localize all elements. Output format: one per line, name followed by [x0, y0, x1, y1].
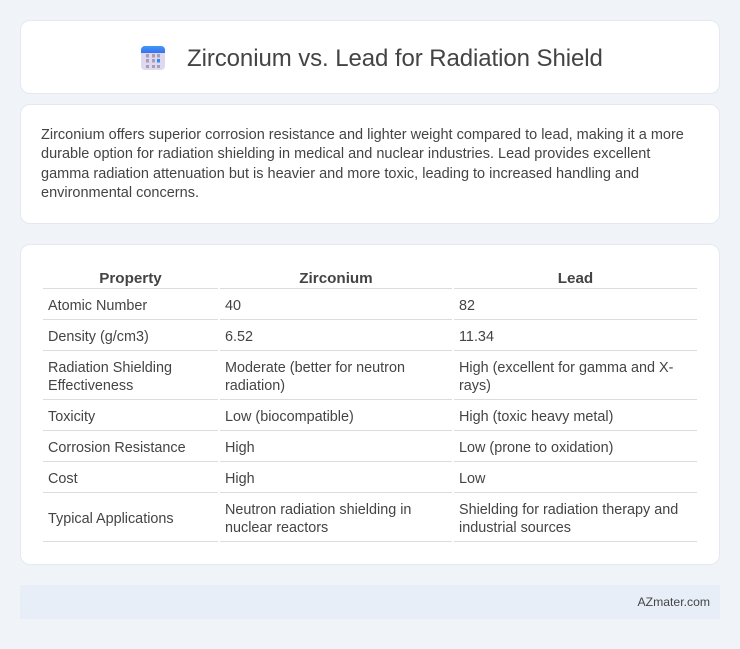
text: nuclear reactors: [225, 520, 328, 536]
intro text: Zirconium offers superior corrosion resistance and lighter weight compared to lead, making it a more: [41, 127, 684, 143]
icon: calendar grid: [141, 46, 165, 70]
intro text: durable option for radiation shielding in medical and nuclear industries. Lead provides excellent: [41, 146, 650, 162]
text: Shielding for radiation therapy and: [459, 502, 678, 518]
intro text: gamma radiation attenuation but is heavier and more toxic, leading to increased handling and: [41, 166, 639, 182]
text: High (excellent for gamma and X-: [459, 360, 673, 376]
row: corrosion resistance: Corrosion Resistance: [48, 440, 186, 456]
column header: Property: Property: [99, 270, 162, 287]
text: rays): [459, 378, 491, 394]
text: industrial sources: [459, 520, 571, 536]
row: cost: Cost: [48, 471, 78, 487]
table: [99, 270, 593, 287]
text: High: [225, 471, 255, 487]
text: High: [225, 440, 255, 456]
text: Low: [459, 471, 485, 487]
row: density: Density (g/cm3): [48, 329, 149, 345]
text: 6.52: [225, 329, 253, 345]
title card: [20, 20, 720, 94]
text: 11.34: [459, 329, 494, 345]
text: Low (biocompatible): [225, 409, 354, 425]
footer credit: AZmater.com: [638, 595, 710, 609]
footer bar: [20, 585, 720, 619]
row: shielding effectiveness: Effectiveness: [48, 378, 133, 394]
text: Neutron radiation shielding in: [225, 502, 411, 518]
row: typical applications: Typical Applications: [48, 511, 174, 527]
column header: Lead: Lead: [558, 270, 593, 287]
row: shielding effectiveness: Radiation Shielding: [48, 360, 172, 376]
title: Zirconium vs. Lead for Radiation Shield: [187, 45, 603, 72]
comparison table panel: [20, 244, 720, 565]
row: toxicity: Toxicity: [48, 409, 95, 425]
column header: Zirconium: Zirconium: [299, 270, 373, 287]
intro text: environmental concerns.: [41, 185, 199, 201]
row: atomic number: Atomic Number: [48, 298, 147, 314]
text: 40: [225, 298, 241, 314]
intro text: [41, 127, 684, 201]
text: Moderate (better for neutron: [225, 360, 405, 376]
text: 82: [459, 298, 475, 314]
text: High (toxic heavy metal): [459, 409, 613, 425]
intro text panel: [20, 104, 720, 224]
text: Low (prone to oxidation): [459, 440, 613, 456]
row: shielding effectiveness: [48, 360, 172, 394]
text: radiation): [225, 378, 285, 394]
